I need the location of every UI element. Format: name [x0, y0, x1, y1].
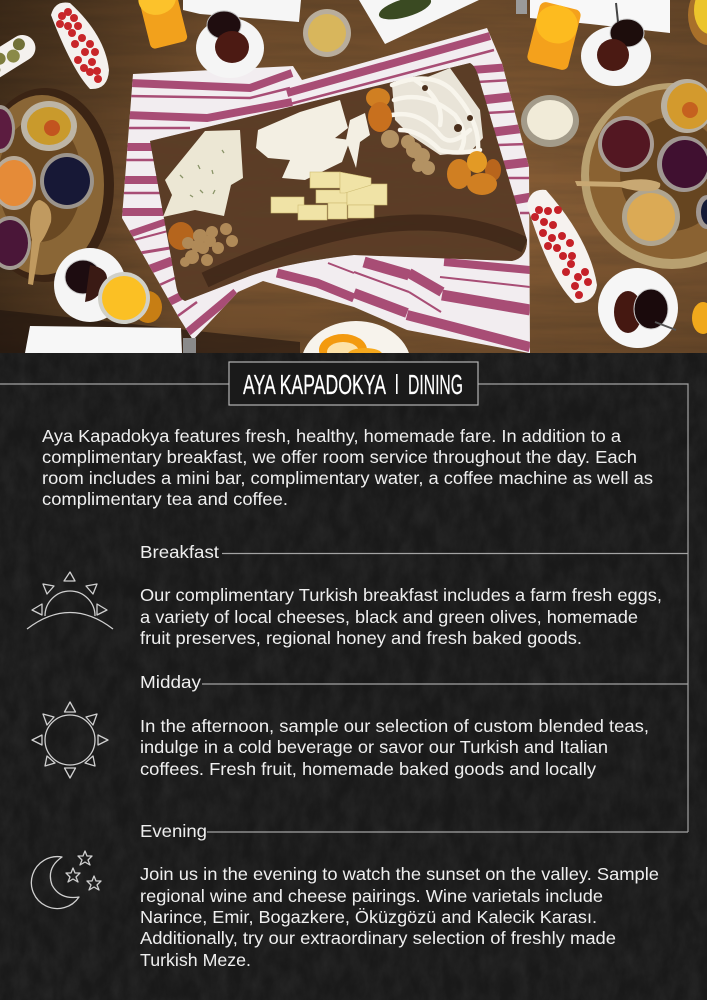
wooden spoon — [28, 200, 51, 285]
olives dish — [0, 35, 36, 78]
striped towel — [120, 28, 531, 353]
midday text: indulge in a cold beverage or savor our Turkish and Italian — [140, 737, 608, 757]
title box: DINING — [408, 369, 463, 400]
evening text: Turkish Meze. — [140, 950, 251, 970]
evening text — [140, 864, 659, 970]
midday text: In the afternoon, sample our selection of custom blended teas, — [140, 716, 649, 736]
intro text: room includes a mini bar, complimentary water, a coffee machine as well as — [42, 468, 653, 488]
chalkboard background — [0, 353, 707, 1000]
intro text — [42, 426, 653, 509]
red currant dish left — [51, 2, 109, 89]
heading: Breakfast: Breakfast — [140, 542, 219, 562]
wooden platter right with preserves — [575, 79, 707, 269]
frame lines — [0, 384, 688, 832]
wooden table — [0, 0, 707, 353]
saucer and tea glass top — [196, 10, 264, 70]
midday text: coffees. Fresh fruit, homemade baked goods and locally — [140, 759, 596, 779]
lemon — [692, 302, 707, 334]
icon: rising sun — [27, 572, 113, 629]
photo: Turkish breakfast table spread — [0, 0, 707, 353]
evening text: Join us in the evening to watch the sunset on the valley. Sample — [140, 864, 659, 884]
cubed yellow cheese — [271, 172, 387, 220]
preserve bowl honey right — [661, 79, 707, 133]
evening text: regional wine and cheese pairings. Wine varietals include — [140, 886, 603, 906]
intro text: Aya Kapadokya features fresh, healthy, homemade fare. In addition to a — [42, 426, 621, 446]
bowl of honeycomb top — [303, 9, 351, 57]
corner bowl top right — [688, 0, 707, 45]
title box — [229, 362, 478, 405]
crumbled white cheese — [256, 100, 370, 180]
white plate top — [183, 0, 301, 22]
preserve bowl dark — [696, 195, 707, 229]
herbed white cheese — [163, 130, 243, 217]
saucer and tea glass top right — [581, 3, 651, 86]
heading: Midday: Midday — [140, 672, 201, 692]
preserve bowl cherry — [598, 116, 654, 172]
saucer and tea glass bottom right — [598, 268, 678, 348]
preserve bowl blackberry — [40, 153, 94, 209]
icon: moon and stars — [31, 851, 101, 909]
wooden platter left with preserves — [0, 88, 114, 285]
juice glass top left — [135, 0, 188, 50]
saucer, tea and juice bottom left — [54, 248, 162, 324]
white kaymak bowl — [521, 95, 579, 147]
wooden spoon right — [575, 179, 660, 191]
heading: Evening: Evening — [140, 821, 207, 841]
white plate top right — [516, 0, 670, 33]
white plate bottom — [25, 326, 196, 353]
walnuts and apricot — [168, 222, 238, 267]
title box: AYA KAPADOKYA — [243, 369, 386, 400]
preserve bowl orange — [0, 156, 36, 210]
dried apricots — [366, 88, 501, 195]
red currant dish right — [527, 190, 597, 303]
white plate with herbs top — [359, 0, 479, 44]
juice glass top right — [526, 1, 582, 71]
preserve bowl quince — [622, 188, 680, 246]
icon: midday sun — [32, 702, 108, 778]
intro text: complimentary breakfast, we offer room service throughout the day. Each — [42, 447, 637, 467]
preserve bowl honey — [21, 101, 77, 151]
midday text — [140, 716, 649, 779]
breakfast text: a variety of local cheeses, black and green olives, homemade — [140, 607, 638, 627]
preserve bowl berry right — [657, 136, 707, 192]
walnuts near apricots — [381, 130, 435, 175]
breakfast text: fruit preserves, regional honey and fresh baked goods. — [140, 628, 582, 648]
preserve bowl berry — [0, 105, 15, 153]
evening text: Additionally, try our extraordinary selection of freshly made — [140, 928, 616, 948]
plate with orange slices — [303, 321, 409, 353]
evening text: Narince, Emir, Bogazkere, Öküzgözü and Kalecik Karası. — [140, 907, 597, 927]
preserve bowl plum — [0, 216, 31, 270]
intro text: complimentary tea and coffee. — [42, 489, 288, 509]
shredded string cheese — [392, 68, 483, 155]
wooden cheese board — [150, 63, 527, 301]
breakfast text — [140, 585, 662, 648]
breakfast text: Our complimentary Turkish breakfast includes a farm fresh eggs, — [140, 585, 662, 605]
